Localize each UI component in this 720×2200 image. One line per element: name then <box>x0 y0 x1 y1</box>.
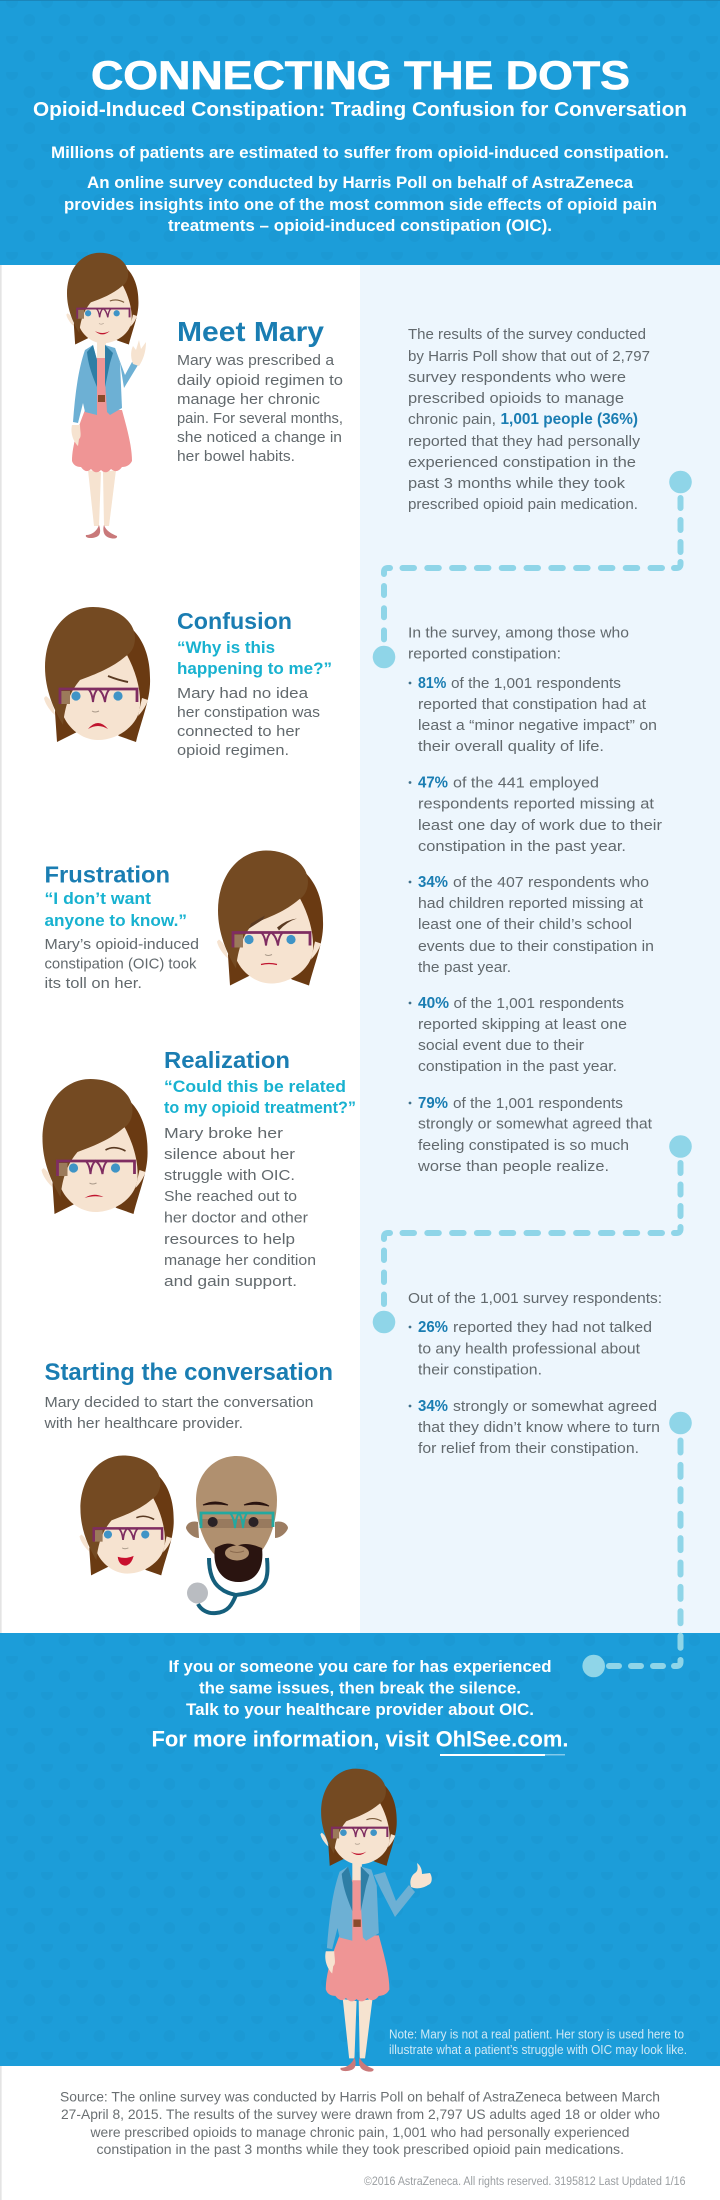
text block: Realization: to my opioid treatment?” <box>164 1098 356 1117</box>
text block: survey results: past 3 months while they took <box>408 475 626 492</box>
character: Mary confused face <box>44 607 150 742</box>
text block: survey results: survey respondents who were <box>408 369 626 386</box>
text block: survey among those who reported constipation: of the 441 employed <box>453 774 599 792</box>
text block: out of the 1,001 respondents: 26% <box>418 1319 448 1336</box>
note <box>389 2028 687 2057</box>
text block: survey among those who reported constipation: had children reported missing at <box>418 895 644 912</box>
text block: out of the 1,001 respondents: reported they had not talked <box>453 1319 652 1336</box>
text block: survey results: The results of the survey conducted <box>408 326 646 343</box>
closing message: For more information, visit OhISee.com. <box>152 1726 568 1752</box>
text block: survey among those who reported constipation: of the 1,001 respondents <box>451 675 621 692</box>
text block: Meet Mary: her bowel habits. <box>177 448 295 465</box>
text block: Frustration: constipation (OIC) took <box>44 956 197 972</box>
text block: survey among those who reported constipation: respondents reported missing at <box>418 796 655 812</box>
text block: survey among those who reported constipation: of the 1,001 respondents <box>454 995 624 1012</box>
text block: Meet Mary <box>177 316 343 465</box>
text block: Starting the conversation: Mary decided to start the conversation <box>44 1394 314 1411</box>
source text: 27-April 8, 2015. The results of the survey were drawn from 2,797 US adults aged 18 or older who <box>61 2106 660 2122</box>
text block: Realization: Mary broke her <box>164 1125 283 1142</box>
text block: Frustration: its toll on her. <box>44 975 142 992</box>
text block: survey among those who reported constipation: reported constipation: <box>408 646 561 662</box>
text block: Realization: struggle with OIC. <box>164 1167 295 1184</box>
text block: survey results: reported that they had personally <box>408 433 641 450</box>
text block: Frustration: Mary’s opioid-induced <box>44 936 199 953</box>
text block: out of the 1,001 respondents: for relief from their constipation. <box>418 1440 639 1457</box>
text block: Realization: She reached out to <box>164 1188 297 1205</box>
text block: Realization: silence about her <box>164 1146 295 1163</box>
text block: Realization: and gain support. <box>164 1273 297 1290</box>
text block: survey among those who reported constipation: 34% <box>418 874 448 891</box>
connector: third dotted path <box>582 1412 692 1677</box>
text block: out of the 1,001 respondents: Out of the 1,001 survey respondents: <box>408 1290 662 1307</box>
text block: Meet Mary: pain. For several months, <box>177 410 343 427</box>
text block: Confusion <box>177 608 332 759</box>
text block: survey results: prescribed opioid pain medication. <box>408 496 638 513</box>
text block: survey results: prescribed opioids to manage <box>408 390 624 407</box>
closing message: Talk to your healthcare provider about OIC. <box>186 1700 534 1719</box>
text block: Meet Mary: Mary was prescribed a <box>177 352 335 369</box>
connector: second dotted path <box>373 1135 692 1333</box>
source text <box>60 2088 660 2157</box>
character: Mary smiling face <box>80 1456 174 1575</box>
panel: header band <box>0 0 720 265</box>
text block: Realization <box>164 1047 356 1290</box>
text block: out of the 1,001 respondents: to any health professional about <box>418 1340 641 1358</box>
copyright: ©2016 AstraZeneca. All rights reserved. 3195812 Last Updated 1/16 <box>364 2176 686 2188</box>
intro text: treatments – opioid-induced constipation (OIC). <box>168 216 552 235</box>
note: illustrate what a patient’s struggle with OIC may look like. <box>389 2043 687 2057</box>
intro text: Millions of patients are estimated to suffer from opioid-induced constipation. <box>51 143 669 162</box>
text block: Frustration: Frustration <box>44 862 170 888</box>
text block: survey among those who reported constipation: worse than people realize. <box>417 1158 609 1175</box>
text block: out of the 1,001 respondents: that they didn’t know where to turn <box>418 1419 660 1436</box>
text block: survey among those who reported constipation: feeling constipated is so much <box>418 1137 629 1154</box>
source text: Source: The online survey was conducted by Harris Poll on behalf of AstraZeneca between March <box>60 2088 660 2104</box>
text block: Confusion: happening to me?” <box>177 659 332 678</box>
text block: Confusion: opioid regimen. <box>177 742 289 759</box>
source text: constipation in the past 3 months while they took prescribed opioid pain medications. <box>96 2141 624 2157</box>
text block: survey among those who reported constipation: 79% <box>418 1095 448 1112</box>
text block: Starting the conversation: Starting the conversation <box>44 1359 333 1386</box>
closing message: the same issues, then break the silence. <box>199 1678 521 1698</box>
text block: Confusion: “Why is this <box>177 638 275 657</box>
text block: survey among those who reported constipation: their overall quality of life. <box>418 738 604 755</box>
intro text: provides insights into one of the most common side effects of opioid pain <box>64 195 657 214</box>
text block: survey among those who reported constipation: the past year. <box>418 959 511 976</box>
character: Meet Mary waving <box>66 253 146 539</box>
text block: out of the 1,001 respondents: 34% <box>418 1398 448 1415</box>
text block: survey among those who reported constipation: reported skipping at least one <box>418 1016 627 1033</box>
text block: Realization: “Could this be related <box>164 1077 346 1096</box>
text block: Starting the conversation <box>43 1359 333 1432</box>
character: Mary thumbs up <box>320 1769 432 2072</box>
source text: were prescribed opioids to manage chronic pain, 1,001 who had personally experienced <box>90 2124 630 2140</box>
text block: Frustration: anyone to know.” <box>44 911 187 930</box>
text block: survey among those who reported constipation: constipation in the past year. <box>418 1058 617 1075</box>
text block: survey results: by Harris Poll show that out of 2,797 <box>408 348 650 365</box>
text block: survey among those who reported constipation: 40% <box>418 995 449 1012</box>
text block: out of the 1,001 respondents: strongly or somewhat agreed <box>453 1398 657 1415</box>
text block: Realization: resources to help <box>164 1231 295 1248</box>
text block: Meet Mary: daily opioid regimen to <box>177 372 343 389</box>
text block: Realization: manage her condition <box>164 1252 316 1269</box>
text block: Confusion: connected to her <box>177 723 300 740</box>
text block: survey results: 1,001 people (36%) <box>500 411 638 428</box>
subtitle: Opioid-Induced Constipation: Trading Confusion for Conversation <box>33 99 687 121</box>
character: Mary frustrated face <box>217 850 323 986</box>
text block: survey among those who reported constipation: of the 407 respondents who <box>453 874 649 891</box>
character: doctor with stethoscope <box>186 1456 288 1613</box>
text block: Meet Mary: she noticed a change in <box>177 429 342 446</box>
text block: out of the 1,001 respondents <box>408 1290 662 1457</box>
text block: survey among those who reported constipation: social event due to their <box>418 1037 584 1054</box>
closing message <box>152 1657 568 1756</box>
text block: survey among those who reported constipation: least one day of work due to their <box>418 817 662 834</box>
text block: Confusion: Mary had no idea <box>177 685 309 702</box>
text block: survey among those who reported constipation: strongly or somewhat agreed that <box>418 1116 653 1132</box>
text block: Meet Mary: manage her chronic <box>177 391 321 408</box>
text block: survey among those who reported constipation: events due to their constipation in <box>418 938 654 955</box>
intro text <box>51 143 669 235</box>
text block: survey among those who reported constipation: of the 1,001 respondents <box>453 1095 623 1112</box>
character: Mary realization face <box>42 1079 148 1214</box>
text block: survey among those who reported constipation: constipation in the past year. <box>418 838 626 855</box>
text block: survey results <box>408 326 650 513</box>
text block: survey among those who reported constipation: reported that constipation had at <box>418 696 647 713</box>
panel: closing call to action band <box>0 1633 720 2066</box>
text block: survey results: experienced constipation in the <box>408 454 636 471</box>
text block: Frustration <box>44 862 199 992</box>
text block: survey results: chronic pain, <box>408 411 496 428</box>
text block: out of the 1,001 respondents: their constipation. <box>418 1362 542 1378</box>
text block: Realization: Realization <box>164 1047 290 1073</box>
text block: Realization: her doctor and other <box>164 1210 308 1226</box>
text block: Frustration: “I don’t want <box>44 889 151 908</box>
note: Note: Mary is not a real patient. Her story is used here to <box>389 2028 684 2042</box>
text block: survey among those who reported constipation: least one of their child’s school <box>418 916 632 933</box>
text block: Confusion: her constipation was <box>177 704 320 721</box>
text block: Confusion: Confusion <box>177 608 292 634</box>
intro text: An online survey conducted by Harris Poll on behalf of AstraZeneca <box>87 173 634 192</box>
text block: Starting the conversation: with her healthcare provider. <box>43 1415 243 1432</box>
text block: survey among those who reported constipation: least a “minor negative impact” on <box>418 717 657 734</box>
text block: survey among those who reported constipation: In the survey, among those who <box>408 624 629 642</box>
closing message: If you or someone you care for has experienced <box>168 1657 552 1676</box>
text block: survey among those who reported constipation: 81% <box>418 675 446 692</box>
text block: survey among those who reported constipation <box>408 624 662 1175</box>
panel: survey results background <box>360 265 720 1633</box>
text block: Meet Mary: Meet Mary <box>177 316 324 347</box>
text block: survey among those who reported constipation: 47% <box>418 774 448 792</box>
title: CONNECTING THE DOTS <box>91 54 630 98</box>
connector: first dotted path <box>373 471 692 668</box>
